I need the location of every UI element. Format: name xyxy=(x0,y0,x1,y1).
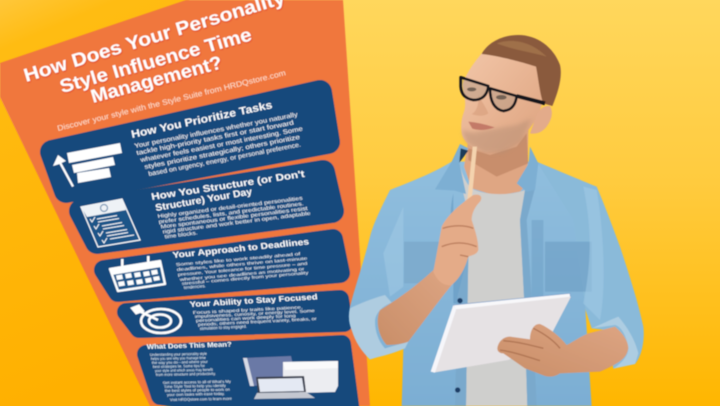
shirt: body and left sleeve xyxy=(349,162,592,406)
mouth xyxy=(468,122,495,130)
body text: the way you do—and where your xyxy=(152,360,209,365)
body text: Get instant access to all of What's My xyxy=(163,380,231,385)
body text: time blocks. xyxy=(164,230,198,240)
body text: pressure. Your tolerance for time pressure – and xyxy=(177,261,309,277)
heading: How You Prioritize Tasks xyxy=(130,99,274,141)
body text: whatever feels easiest or most interesting. Some xyxy=(139,125,304,164)
body text: Your personality influences whether you naturally xyxy=(134,111,300,150)
body text: from more structure and productivity. xyxy=(156,372,216,377)
pencil xyxy=(465,147,477,220)
subtitle: Discover your style with the Style Suite from HRDQstore.com xyxy=(56,68,287,133)
photo: man thinking with notebook xyxy=(349,35,644,406)
cuffs xyxy=(349,295,638,369)
background: yellow left side xyxy=(0,0,190,406)
nose shadow and eyes xyxy=(467,87,507,116)
panel: how you structure your day: Structure) Your Day xyxy=(154,186,254,214)
heading: How You Structure (or Don't xyxy=(150,169,307,203)
title: Management? xyxy=(88,51,225,107)
body text xyxy=(193,305,318,331)
body text: Visit HRDQstore.com to learn more xyxy=(170,397,232,402)
title: Style Influence Time xyxy=(57,23,254,97)
panel: your ability to stay focused xyxy=(126,292,344,333)
body text xyxy=(157,196,311,240)
body text: periods; others need frequent variety, breaks, or xyxy=(198,316,318,327)
buttons xyxy=(457,298,463,303)
body text xyxy=(175,251,310,290)
shirt placket xyxy=(455,188,537,406)
panel: what does this mean xyxy=(146,341,352,406)
collar xyxy=(435,144,538,194)
infographic poster in perspective xyxy=(0,0,370,406)
body text: stressful – comes directly from your personality xyxy=(181,270,310,286)
panel: how you prioritize tasks xyxy=(52,92,328,191)
poster: orange sheet xyxy=(0,0,370,406)
t-shirt xyxy=(459,163,527,406)
shirt: folds and pockets xyxy=(383,187,604,320)
title: How Does Your Personality xyxy=(21,0,288,86)
body text: based on urgency, energy, or personal preference. xyxy=(148,141,302,178)
body text xyxy=(134,111,304,178)
body text: your own tasks with ease today. xyxy=(167,392,225,397)
body text: Focus is shaped by traits like patience, xyxy=(193,305,303,315)
panel: your approach to deadlines xyxy=(104,236,340,292)
glasses xyxy=(461,77,545,111)
body text: best strategies lie. Some tips for xyxy=(153,364,206,369)
body text: whether you see deadlines as motivating or xyxy=(179,266,306,282)
right forearm and hand xyxy=(497,324,628,377)
face xyxy=(461,53,543,152)
product image: book, box and laptop xyxy=(243,356,338,399)
body text xyxy=(150,352,232,402)
hair xyxy=(482,35,561,106)
body text: helps you see why you manage time xyxy=(151,356,206,361)
body text: deadlines, while others thrive on last-minute xyxy=(176,256,309,272)
heading: Your Ability to Stay Focused xyxy=(189,292,318,309)
left forearm xyxy=(378,268,452,345)
thinking hand xyxy=(433,195,481,285)
title xyxy=(21,0,288,107)
body text: rigid structure and work better in open, adaptable xyxy=(162,211,311,235)
stubble xyxy=(462,118,532,153)
body text: Understanding your personality style xyxy=(150,352,207,357)
notebook xyxy=(431,293,571,373)
body text: Some styles like to work steadily ahead of xyxy=(175,251,302,267)
icon: priority bars with arrow xyxy=(53,143,122,187)
heading: Your Approach to Deadlines xyxy=(172,236,310,260)
body text: Time Style Tool to help you identify xyxy=(164,384,226,389)
neck shadow xyxy=(468,133,528,177)
body text: Highly organized or detail-oriented personalities xyxy=(157,196,304,220)
ear xyxy=(530,106,552,134)
icon: target with arrow xyxy=(131,305,181,333)
body text: personalities can work deeply for long xyxy=(196,313,297,323)
shirt: right sleeve xyxy=(537,162,644,369)
icon: checklist clipboard xyxy=(81,199,140,247)
body text: styles prioritize strategically; others prioritize xyxy=(144,134,301,171)
body text: prefer schedules, lists, and predictable routines. xyxy=(158,201,304,225)
neck xyxy=(464,130,528,196)
body text: impulsiveness, curiosity, or energy level. Some xyxy=(195,308,316,319)
body text: stimulation to stay engaged. xyxy=(200,324,247,331)
body text: More spontaneous or flexible personalities resist xyxy=(160,206,309,230)
panel: how you structure your day xyxy=(81,169,332,247)
body text: the best styles of people to work on xyxy=(165,388,230,393)
body text: tendencies. xyxy=(183,283,206,290)
icon: calendar xyxy=(110,256,165,291)
body text: your style and which areas may benefit xyxy=(155,368,214,373)
heading: What Does This Mean? xyxy=(147,341,232,351)
body text: tackle high-priority tasks first or start forward xyxy=(136,119,295,157)
